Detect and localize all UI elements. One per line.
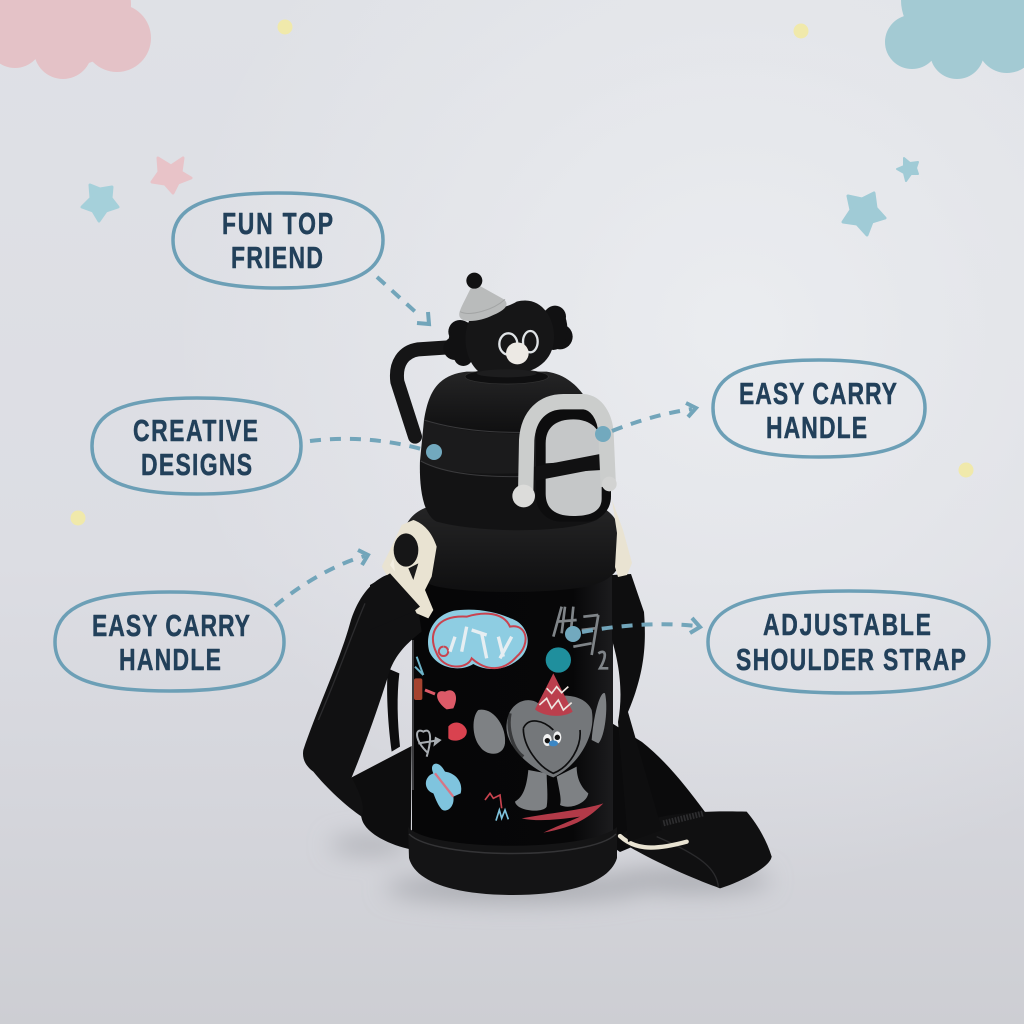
cream buckle bottom (620, 836, 687, 848)
strap end loop (623, 811, 772, 888)
arrow: easy carry handle left (275, 550, 368, 606)
callout: easy carry handle right (713, 360, 925, 457)
body (408, 575, 617, 895)
label text: HANDLE (119, 642, 221, 677)
lid upper (424, 372, 600, 433)
lid middle (420, 420, 610, 474)
arrow: fun top friend (377, 277, 429, 324)
label text (736, 607, 966, 677)
label text: DESIGNS (141, 447, 252, 482)
label text (739, 376, 897, 445)
outline (173, 193, 383, 288)
label text: SHOULDER STRAP (736, 642, 966, 677)
doodle: party hat (535, 647, 573, 716)
doodle: cloud (428, 610, 528, 669)
friend nose (506, 342, 529, 364)
friend base (477, 369, 537, 377)
label text: ADJUSTABLE (763, 607, 931, 642)
label text: HANDLE (766, 410, 867, 445)
outline (708, 591, 989, 693)
rear strap left (352, 668, 412, 849)
decoration: pink cloud (0, 0, 151, 79)
illustration: bottle (303, 273, 772, 895)
bottle shadow (330, 837, 770, 902)
shoulder (403, 505, 622, 592)
callout: easy carry handle left (55, 592, 284, 691)
label text: CREATIVE (133, 413, 258, 448)
label text: FUN TOP (222, 206, 333, 241)
back handle (397, 347, 448, 437)
decoration: yellow dots (70, 20, 974, 526)
cream connector right (612, 500, 632, 577)
cream connector left (370, 520, 437, 630)
outline (713, 360, 925, 457)
front strap left (303, 575, 772, 888)
handle strap (537, 461, 603, 473)
arrow: easy carry handle right (595, 403, 696, 442)
outline (92, 398, 301, 494)
callout: creative designs (92, 398, 301, 494)
label text (222, 206, 333, 275)
label text: EASY CARRY (739, 376, 897, 411)
doodle: heart character (474, 693, 606, 811)
label text: EASY CARRY (92, 608, 250, 643)
friend eyes (499, 331, 538, 355)
friend head (465, 300, 554, 375)
handle pad black frame (536, 408, 611, 522)
outline (55, 592, 284, 691)
rear strap right (610, 722, 705, 852)
label text (92, 608, 250, 677)
strap button (394, 533, 418, 567)
arrow: adjustable shoulder strap (565, 618, 700, 642)
arrow: creative designs (310, 439, 442, 460)
callout: adjustable shoulder strap (708, 591, 989, 693)
friend ears (443, 306, 573, 366)
label text (133, 413, 258, 482)
front strap right (612, 574, 662, 842)
callout: fun top friend (173, 193, 383, 288)
party hat (459, 273, 507, 321)
decoration: stars (82, 158, 918, 235)
upper parts (397, 273, 617, 530)
doodle: HEY text (553, 607, 608, 668)
body doodles (414, 607, 608, 833)
collar (465, 369, 548, 384)
handle pad grey (546, 419, 602, 516)
doodle: small squiggle (485, 793, 508, 821)
doodle: red ground scribble (522, 803, 603, 833)
grey arch handle (526, 402, 608, 493)
doodle: hearts and marks (414, 657, 467, 757)
doodle: butterfly (426, 764, 461, 811)
decoration: blue cloud (885, 0, 1024, 79)
label text: FRIEND (231, 240, 323, 275)
lid lower (420, 460, 611, 530)
